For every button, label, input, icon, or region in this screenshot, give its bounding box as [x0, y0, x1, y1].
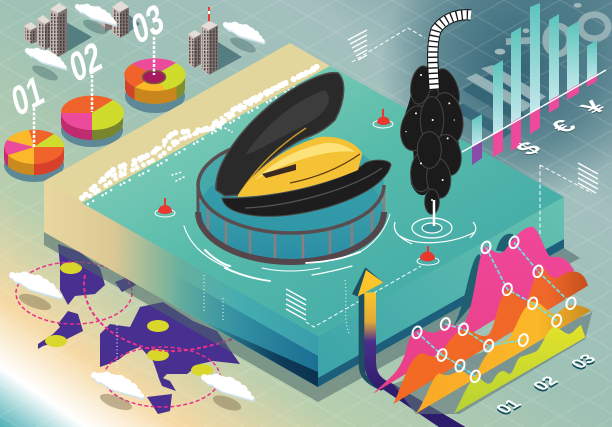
- growth arrow: [352, 267, 466, 427]
- pie chart 01: [4, 130, 64, 182]
- city 3: [188, 7, 242, 75]
- yellow series: [416, 301, 591, 413]
- area chart axis labels: 03: [566, 351, 601, 371]
- pie chart 02: [61, 95, 124, 147]
- dashed annotation lines and text stripes: [117, 28, 598, 370]
- area chart axis labels: 02: [528, 375, 563, 395]
- currency symbols: [509, 97, 612, 160]
- area chart axis labels: 02: [528, 373, 563, 393]
- mussel meat: [238, 137, 362, 197]
- block shadow: [44, 232, 580, 402]
- hanging mussel cluster: [397, 15, 471, 214]
- area chart axis labels: 03: [566, 353, 601, 373]
- currency symbols: €: [544, 117, 583, 138]
- cloud top right: [223, 22, 266, 55]
- area chart axis labels: [491, 351, 601, 418]
- cloud map left: [9, 271, 63, 313]
- cloud map right: [201, 373, 255, 414]
- sand strip: [44, 43, 330, 203]
- green series: [454, 325, 585, 413]
- pie labels and leader lines: 01: [7, 67, 48, 126]
- currency symbols: $: [509, 138, 548, 159]
- cloud top left: [25, 48, 68, 83]
- currency symbols: $: [509, 139, 548, 160]
- trend lines: [417, 242, 571, 376]
- drop ripples under cluster: [394, 200, 476, 244]
- left face: [44, 181, 318, 387]
- ripples around cage: [184, 214, 390, 281]
- cloud map bottom: [91, 371, 145, 413]
- decorative gears and stairs, top right: [453, 3, 608, 138]
- rope: [433, 15, 471, 90]
- water surface: [82, 66, 564, 336]
- pie chart 03: [124, 58, 186, 113]
- pie labels and leader lines: [7, 0, 168, 147]
- currency symbols: ¥: [574, 98, 612, 119]
- area chart axis labels: 01: [491, 398, 526, 418]
- buoys: [155, 109, 439, 265]
- city 2: [99, 1, 140, 38]
- currency symbols: €: [544, 116, 583, 137]
- foam: [82, 62, 325, 204]
- cloud top middle: [75, 4, 118, 37]
- area charts: [373, 227, 593, 414]
- city 1: [24, 3, 92, 57]
- data rings: [411, 235, 577, 383]
- fish cage: [198, 137, 384, 262]
- area chart axis labels: 01: [491, 396, 526, 416]
- pink series: [373, 227, 574, 394]
- bar chart: [462, 3, 612, 165]
- lower shell: [222, 160, 391, 216]
- world map: [16, 244, 240, 414]
- water block: [44, 43, 564, 387]
- pie labels and leader lines: 02: [65, 33, 106, 92]
- right face: [318, 197, 564, 387]
- upper shell: [216, 73, 344, 196]
- mussel: [216, 73, 391, 216]
- currency symbols: ¥: [574, 97, 612, 118]
- orange series: [393, 267, 588, 404]
